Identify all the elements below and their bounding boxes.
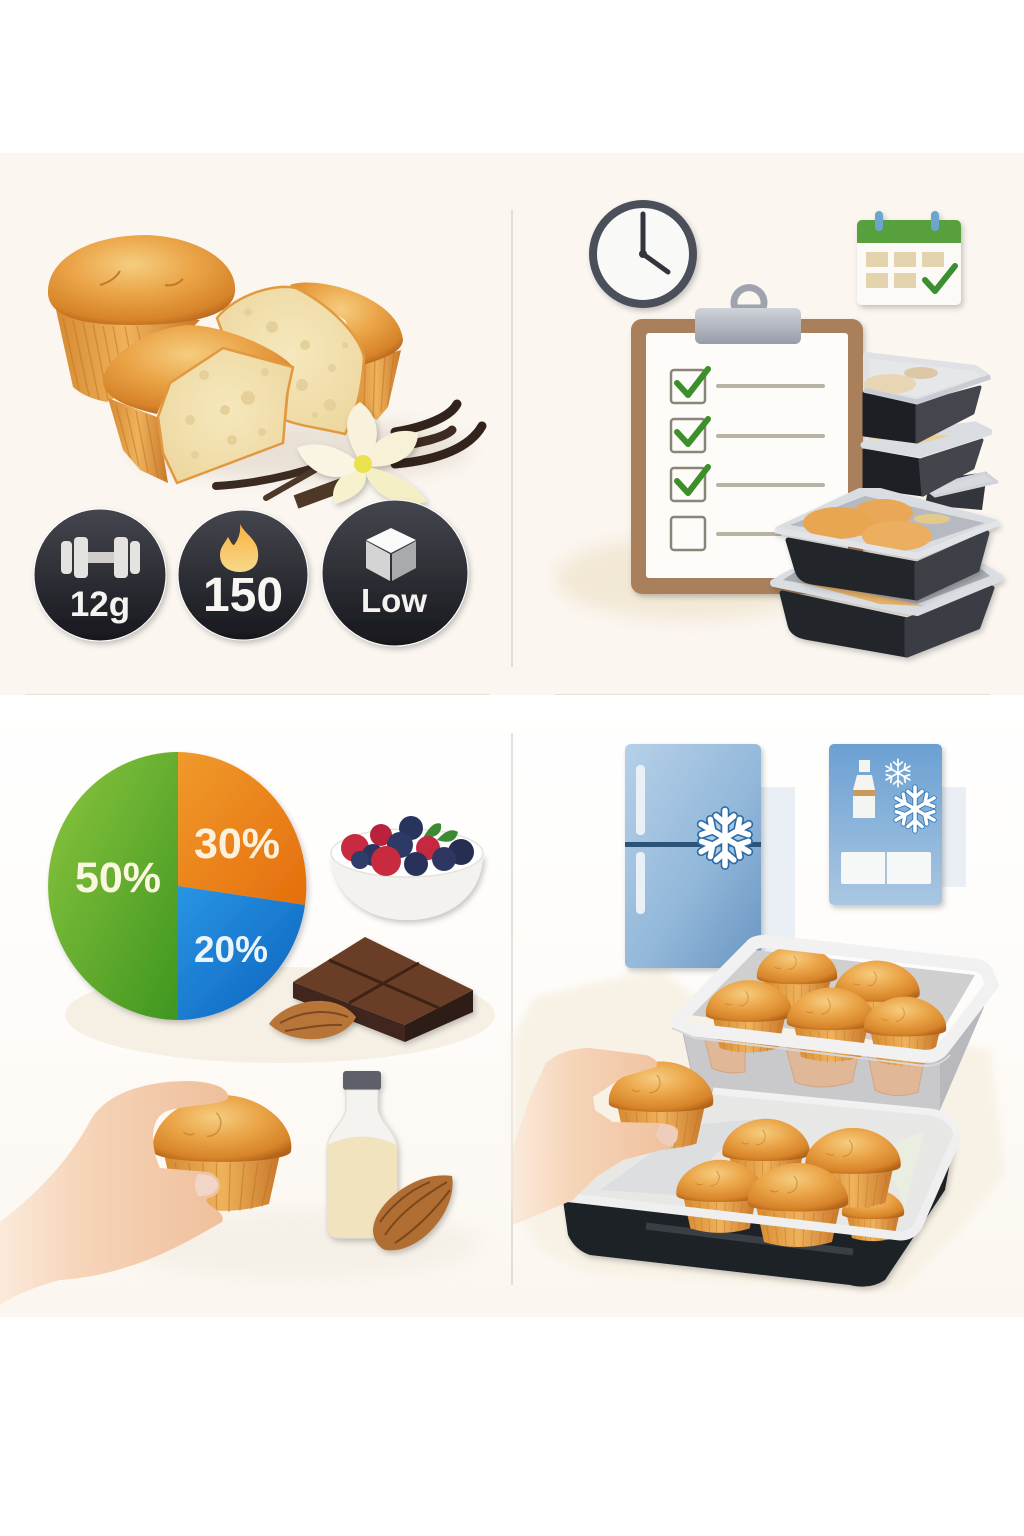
milk bottle xyxy=(327,1071,397,1238)
held muffin xyxy=(609,1062,713,1150)
muffin wrappers in container xyxy=(705,1040,925,1096)
badge: low sugar xyxy=(322,500,468,646)
label 20%: 20% xyxy=(194,929,268,970)
black tray with muffins xyxy=(513,1048,958,1287)
icon: almond xyxy=(269,1001,356,1039)
bowl of berries xyxy=(331,816,483,920)
vanilla flower xyxy=(297,402,427,504)
ghost panels behind appliances xyxy=(755,787,966,967)
icon: almond large xyxy=(373,1175,453,1250)
cut muffin front xyxy=(103,325,293,483)
protein value: 12g xyxy=(70,585,130,624)
stacked meal prep containers xyxy=(774,355,999,655)
clear container of muffins xyxy=(672,941,992,1112)
icon: snowflake xyxy=(697,810,753,866)
pie chart xyxy=(48,752,306,1020)
cut muffin right xyxy=(217,282,403,434)
icon: sugar cube xyxy=(366,528,416,581)
panel: muffin nutrition xyxy=(34,235,482,646)
icon: flame xyxy=(220,524,258,572)
container 1 top xyxy=(864,355,990,442)
badge: protein 12g xyxy=(34,509,166,641)
muffin and vanilla illustration xyxy=(48,235,482,504)
tray rim xyxy=(563,1135,958,1236)
chocolate bar xyxy=(293,937,473,1042)
muffins in tray xyxy=(676,1119,904,1248)
sugar value: Low xyxy=(361,582,427,619)
back whole muffin xyxy=(48,235,235,402)
badge: calories 150 xyxy=(178,510,308,640)
calories value: 150 xyxy=(203,569,283,622)
label 30%: 30% xyxy=(194,820,280,868)
hand xyxy=(513,1048,678,1225)
container body xyxy=(683,1007,983,1112)
icon: freezer card xyxy=(829,744,942,905)
panel: meal prep planning xyxy=(555,204,999,655)
panel: macro balance xyxy=(0,752,495,1305)
icon: dumbbell xyxy=(61,537,140,578)
hand holding muffin xyxy=(0,1081,291,1305)
icon: calendar xyxy=(857,211,961,305)
container 2 xyxy=(864,425,989,495)
checklist rows xyxy=(671,369,823,550)
icon: clock xyxy=(593,204,693,304)
muffins in container xyxy=(706,945,946,1066)
clear lid rim xyxy=(678,941,992,1056)
muffin xyxy=(153,1095,291,1212)
container 5 bottom xyxy=(774,568,999,655)
container 3 back xyxy=(925,472,997,510)
tray lid and paper xyxy=(563,1092,958,1238)
label 50%: 50% xyxy=(75,854,161,902)
lid interior xyxy=(690,950,975,1048)
clip xyxy=(695,288,801,344)
panel: storage xyxy=(513,744,1005,1292)
hand xyxy=(0,1081,228,1305)
bottle glyph xyxy=(853,760,875,818)
container 4 with muffins xyxy=(775,492,998,598)
vanilla pods xyxy=(216,404,482,502)
clipboard checklist xyxy=(631,288,863,594)
icon: fridge xyxy=(625,744,761,968)
